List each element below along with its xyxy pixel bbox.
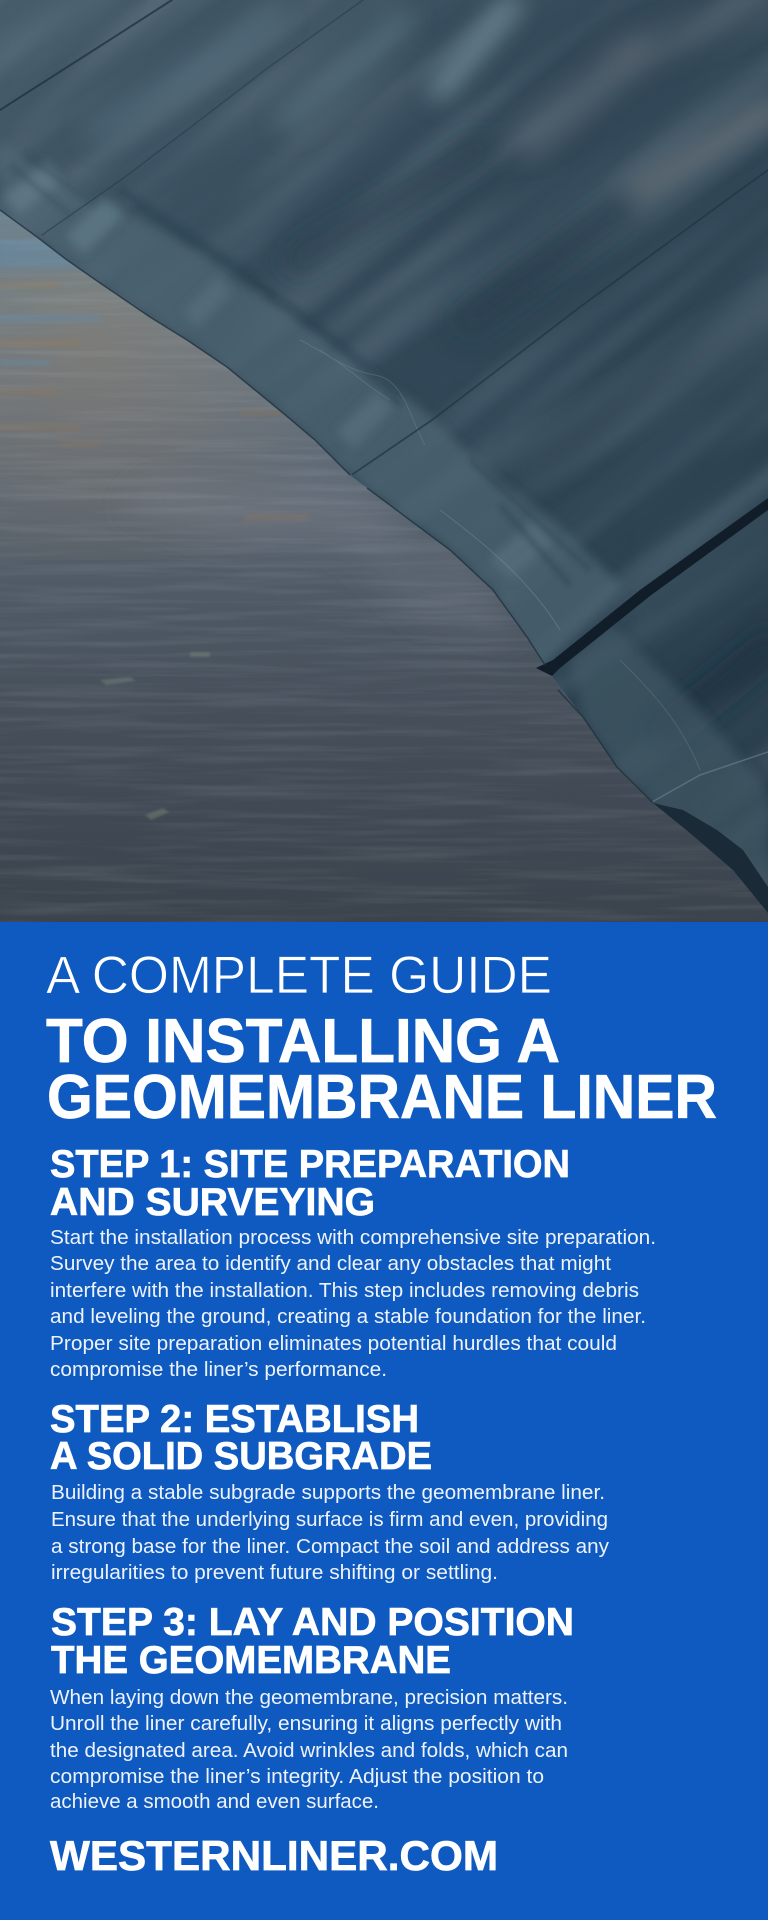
step 2 body text: Building a stable subgrade supports the geomembrane liner. <box>51 1482 605 1504</box>
step 3 body text: compromise the liner’s integrity. Adjust the position to <box>50 1766 544 1788</box>
step 3 heading: STEP 3: LAY AND POSITION <box>51 1601 574 1644</box>
fabric streak texture <box>14 0 768 886</box>
step 3 body text: When laying down the geomembrane, precision matters. <box>50 1687 568 1709</box>
step 2 body text: a strong base for the liner. Compact the soil and address any <box>51 1536 609 1558</box>
step 3 body text <box>50 1687 568 1813</box>
step 3 heading: THE GEOMEMBRANE <box>51 1639 451 1682</box>
liner sheet <box>0 0 768 913</box>
step 1 <box>50 1143 656 1381</box>
shoreline fold band <box>0 142 768 900</box>
step 1 body text: Proper site preparation eliminates potential hurdles that could <box>50 1333 617 1355</box>
step 3 <box>50 1601 574 1813</box>
website footer: WESTERNLINER.COM <box>50 1832 498 1879</box>
panel: blue text background <box>0 922 768 1920</box>
step 3 body text: Unroll the liner carefully, ensuring it aligns perfectly with <box>50 1713 562 1735</box>
title <box>46 946 717 1132</box>
step 1 body text: Start the installation process with comprehensive site preparation. <box>50 1227 656 1249</box>
sheet seams <box>0 0 768 802</box>
band patches along the fold <box>12 170 545 570</box>
step 2 body text: irregularities to prevent future shifting or settling. <box>51 1562 498 1584</box>
step 3 body text: the designated area. Avoid wrinkles and folds, which can <box>50 1740 568 1762</box>
step 1 body text: compromise the liner’s performance. <box>50 1359 387 1381</box>
title line: geomembrane liner: GEOMEMBRANE LINER <box>47 1063 717 1132</box>
water surface <box>0 200 768 922</box>
step 1 body text <box>50 1227 656 1381</box>
title line: to installing a: TO INSTALLING A <box>46 1007 560 1076</box>
step 2 body text <box>51 1482 609 1584</box>
title line: a complete guide: A COMPLETE GUIDE <box>46 946 552 1005</box>
photo: geomembrane liner meeting water <box>0 0 768 922</box>
step 2 heading: A SOLID SUBGRADE <box>50 1435 432 1478</box>
dark shoreline edge <box>0 210 653 803</box>
step 1 heading <box>50 1143 570 1224</box>
soft highlights on the sheet <box>92 0 768 724</box>
step 1 heading: AND SURVEYING <box>50 1181 375 1224</box>
step 2 <box>50 1398 609 1584</box>
fold wrinkles <box>10 155 590 585</box>
step 1 body text: and leveling the ground, creating a stable foundation for the liner. <box>50 1306 646 1328</box>
dark corner flap <box>653 803 768 922</box>
dark seam line <box>536 498 768 676</box>
step 3 body text: achieve a smooth and even surface. <box>50 1791 379 1813</box>
step 2 heading: STEP 2: ESTABLISH <box>50 1398 419 1441</box>
step 3 heading <box>51 1601 574 1682</box>
step 2 heading <box>50 1398 432 1478</box>
step 1 heading: STEP 1: SITE PREPARATION <box>50 1143 570 1186</box>
step 2 body text: Ensure that the underlying surface is firm and even, providing <box>51 1509 608 1531</box>
step 1 body text: Survey the area to identify and clear any obstacles that might <box>50 1253 611 1275</box>
step 1 body text: interfere with the installation. This step includes removing debris <box>50 1280 639 1302</box>
